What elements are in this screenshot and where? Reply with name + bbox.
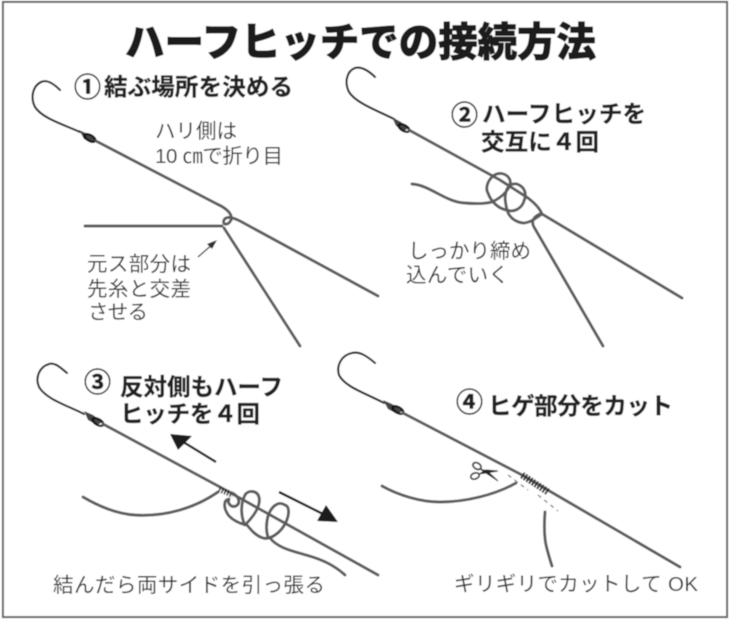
icon: hook 1 xyxy=(33,81,97,144)
panel: step 1 xyxy=(33,73,378,346)
heading: step 2: 交互に４回 xyxy=(481,129,599,155)
panel: step 2 xyxy=(347,68,682,346)
knot: loose loops xyxy=(225,491,289,538)
heading: step 3: ③ xyxy=(84,368,111,398)
panel: step 3 xyxy=(37,364,378,597)
fishing line: leader from the left xyxy=(85,225,222,227)
fishing line: left tag xyxy=(412,184,492,204)
heading: step 4: ヒゲ部分をカット xyxy=(488,393,673,419)
heading: step 2: ハーフヒッチを xyxy=(482,101,646,127)
icon: hook 3 xyxy=(37,364,105,428)
note: leader crossing: 先糸と交差 xyxy=(87,278,191,301)
knot: half hitch loops xyxy=(487,173,542,223)
note: tighten xyxy=(406,240,531,287)
heading: step 2: ② xyxy=(451,101,478,131)
note: leader crossing xyxy=(87,253,191,324)
fishing line: cut left tag xyxy=(382,483,516,502)
icon: hook 2 xyxy=(347,68,411,134)
fishing line: main line xyxy=(409,130,682,298)
icon: hook 4 xyxy=(338,353,405,416)
note: tighten: 込んでいく xyxy=(406,264,509,287)
fishing line: cut lower tag xyxy=(544,512,552,566)
note: leader crossing: 元ス部分は xyxy=(87,253,191,276)
fishing line: left tag xyxy=(83,492,218,515)
note: cut close: ギリギリでカットして OK xyxy=(454,573,698,596)
icon: scissors xyxy=(470,461,498,481)
note: hook side xyxy=(155,120,283,168)
fishing line: lower tag xyxy=(224,228,300,346)
fishing line: main line xyxy=(96,141,378,296)
knot: finished wraps xyxy=(522,475,548,492)
note: hook side: ハリ側は xyxy=(155,120,237,143)
note: leader crossing: させる xyxy=(88,301,148,324)
panel: step 4 xyxy=(338,353,698,596)
arrow: to crossing point xyxy=(198,240,217,257)
heading: step 4: ④ xyxy=(456,388,483,418)
fishing line: right tag xyxy=(270,538,345,575)
fishing line: main line xyxy=(103,424,378,575)
arrow: pull right xyxy=(279,492,338,522)
cut lines xyxy=(508,475,558,511)
heading: step 1: 結ぶ場所を決める xyxy=(104,74,293,100)
arrow: pull left xyxy=(170,434,216,462)
knot: tight wraps xyxy=(219,489,233,495)
fishing line: main line xyxy=(403,413,680,567)
heading: step 1: ① xyxy=(74,73,101,103)
title: ハーフヒッチでの接続方法 xyxy=(125,21,596,65)
note: pull both sides: 結んだら両サイドを引っ張る xyxy=(53,574,325,597)
fishing line: lower tag xyxy=(533,214,603,346)
heading: step 3 xyxy=(84,368,283,427)
note: hook side: 10 ㎝で折り目 xyxy=(155,145,283,168)
heading: step 3: 反対側もハーフ xyxy=(120,374,283,400)
heading: step 2 xyxy=(451,101,646,155)
note: tighten: しっかり締め xyxy=(408,240,531,263)
heading: step 3: ヒッチを４回 xyxy=(120,401,260,427)
